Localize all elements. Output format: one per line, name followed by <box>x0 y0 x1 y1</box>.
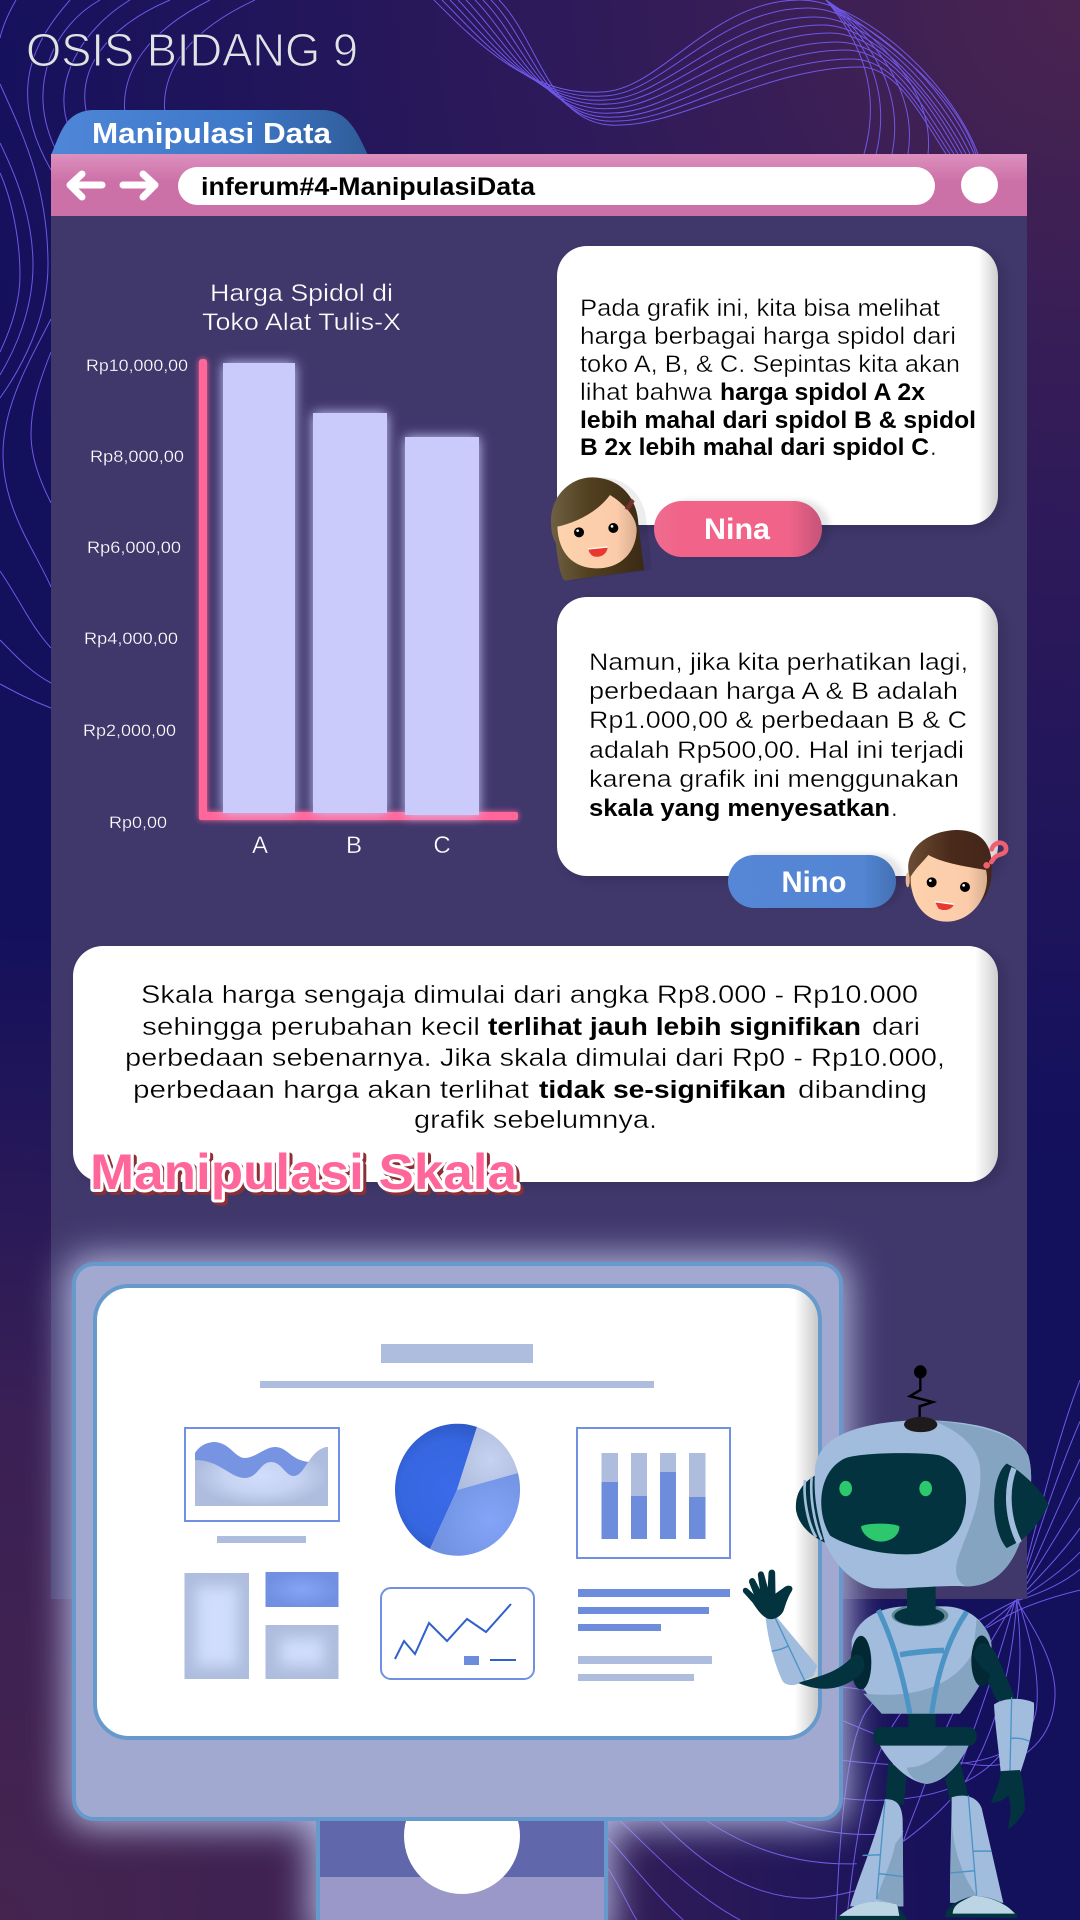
robot ear right <box>994 1463 1048 1548</box>
organisation title: OSIS BIDANG 9 <box>26 24 358 76</box>
y axis labels: Rp0,00 <box>109 813 167 832</box>
address bar <box>178 167 935 205</box>
y axis labels: Rp4,000,00 <box>84 629 178 648</box>
robot waving arm <box>744 1571 864 1689</box>
speech bubble: Nino <box>557 597 998 876</box>
monitor frame <box>74 1264 841 1819</box>
section heading: Manipulasi Skala <box>90 1144 518 1200</box>
speech bubble: Nino: skala yang menyesatkan <box>589 795 890 822</box>
chart axes <box>199 359 518 820</box>
name pill: Nina <box>654 501 822 557</box>
chart title: Toko Alat Tulis-X <box>202 309 401 336</box>
speech bubble: Nina: lebih mahal dari spidol B & spidol <box>580 407 976 434</box>
browser toolbar <box>51 154 1027 216</box>
y axis labels: Rp6,000,00 <box>87 538 181 557</box>
dashboard illustration <box>184 1344 730 1681</box>
browser tab <box>51 110 368 155</box>
speech bubble: Nino: . <box>891 795 898 822</box>
y axis labels: Rp8,000,00 <box>90 447 184 466</box>
avatar: Nina <box>551 477 652 581</box>
icon: back arrow <box>70 174 102 197</box>
speech bubble: Nino: karena grafik ini menggunakan <box>589 766 959 793</box>
y axis labels: Rp2,000,00 <box>83 721 176 740</box>
robot antenna <box>904 1365 937 1432</box>
explanation card: dari <box>872 1013 920 1041</box>
y axis labels <box>83 356 188 832</box>
mini area chart <box>185 1428 339 1543</box>
x axis labels: A <box>252 832 268 859</box>
speech bubble: Nino: perbedaan harga A & B adalah <box>589 678 958 705</box>
bars A B C <box>223 363 479 815</box>
speech bubble: Nina: toko A, B, & C. Sepintas kita akan <box>580 351 960 378</box>
robot body <box>796 1365 1048 1920</box>
line art: top wave <box>434 0 978 154</box>
name pill: Nino <box>728 855 896 908</box>
robot right arm <box>973 1643 1034 1829</box>
mini line chart <box>381 1588 534 1679</box>
window panel body <box>51 216 1027 1599</box>
explanation card: perbedaan harga akan terlihat <box>133 1076 529 1104</box>
monitor screen <box>95 1286 820 1738</box>
icon: forward arrow <box>123 174 155 197</box>
avatar: Nino <box>906 830 1006 922</box>
chart title: Harga Spidol di <box>210 280 393 307</box>
explanation card: tidak se-signifikan <box>539 1076 786 1104</box>
line art: left contours <box>0 0 255 708</box>
speech bubble: Nino: adalah Rp500,00. Hal ini terjadi <box>589 737 964 764</box>
dashboard header bars <box>260 1344 654 1388</box>
browser tab: Manipulasi Data <box>92 118 332 150</box>
speech bubble: Nina <box>557 246 998 525</box>
robot torso <box>851 1585 1003 1714</box>
speech bubble: Nina: B 2x lebih mahal dari spidol C <box>580 434 929 461</box>
monitor stand <box>318 1778 606 1920</box>
robot pelvis and belt <box>873 1712 977 1784</box>
monitor glow <box>66 1256 849 1920</box>
bar chart <box>83 280 518 859</box>
explanation card: Skala harga sengaja dimulai dari angka Rp8.000 - Rp10.000 <box>141 981 918 1009</box>
speech bubble: Nina: harga spidol A 2x <box>720 379 926 406</box>
speech bubble: Nina: harga berbagai harga spidol dari <box>580 323 956 350</box>
explanation card <box>73 946 998 1182</box>
address bar: inferum#4-ManipulasiData <box>201 173 536 201</box>
speech bubble: Nina: . <box>930 434 937 461</box>
explanation card: dibanding <box>798 1076 927 1104</box>
robot ear left <box>796 1475 825 1543</box>
speech bubble: Nino: Namun, jika kita perhatikan lagi, <box>589 649 968 676</box>
robot legs <box>837 1761 1017 1920</box>
y axis labels: Rp10,000,00 <box>86 356 188 375</box>
explanation card: perbedaan sebenarnya. Jika skala dimulai dari Rp0 - Rp10.000, <box>125 1044 945 1072</box>
x axis labels: B <box>346 832 362 859</box>
speech bubble: Nina: lihat bahwa <box>580 379 713 406</box>
speech bubble: Nino: Rp1.000,00 & perbedaan B & C <box>589 707 967 734</box>
explanation card: terlihat jauh lebih signifikan <box>488 1013 861 1041</box>
x axis labels: C <box>433 832 451 859</box>
chart title <box>202 280 401 336</box>
x axis labels <box>252 832 451 859</box>
mini text lines <box>578 1589 730 1681</box>
speech bubble: Nina: Pada grafik ini, kita bisa melihat <box>580 295 940 322</box>
name pill: Nino: Nino <box>782 866 846 899</box>
robot mascot <box>744 1365 1048 1920</box>
explanation card: grafik sebelumnya. <box>414 1106 657 1134</box>
explanation card: sehingga perubahan kecil <box>142 1013 480 1041</box>
mini tile blocks <box>184 1572 338 1679</box>
toolbar button <box>961 166 998 204</box>
name pill: Nina: Nina <box>704 513 770 546</box>
line art: bottom right mesh <box>608 1380 1080 1920</box>
mini pie chart <box>395 1424 520 1556</box>
robot head <box>815 1420 1031 1589</box>
mini stacked bar chart <box>577 1428 730 1558</box>
